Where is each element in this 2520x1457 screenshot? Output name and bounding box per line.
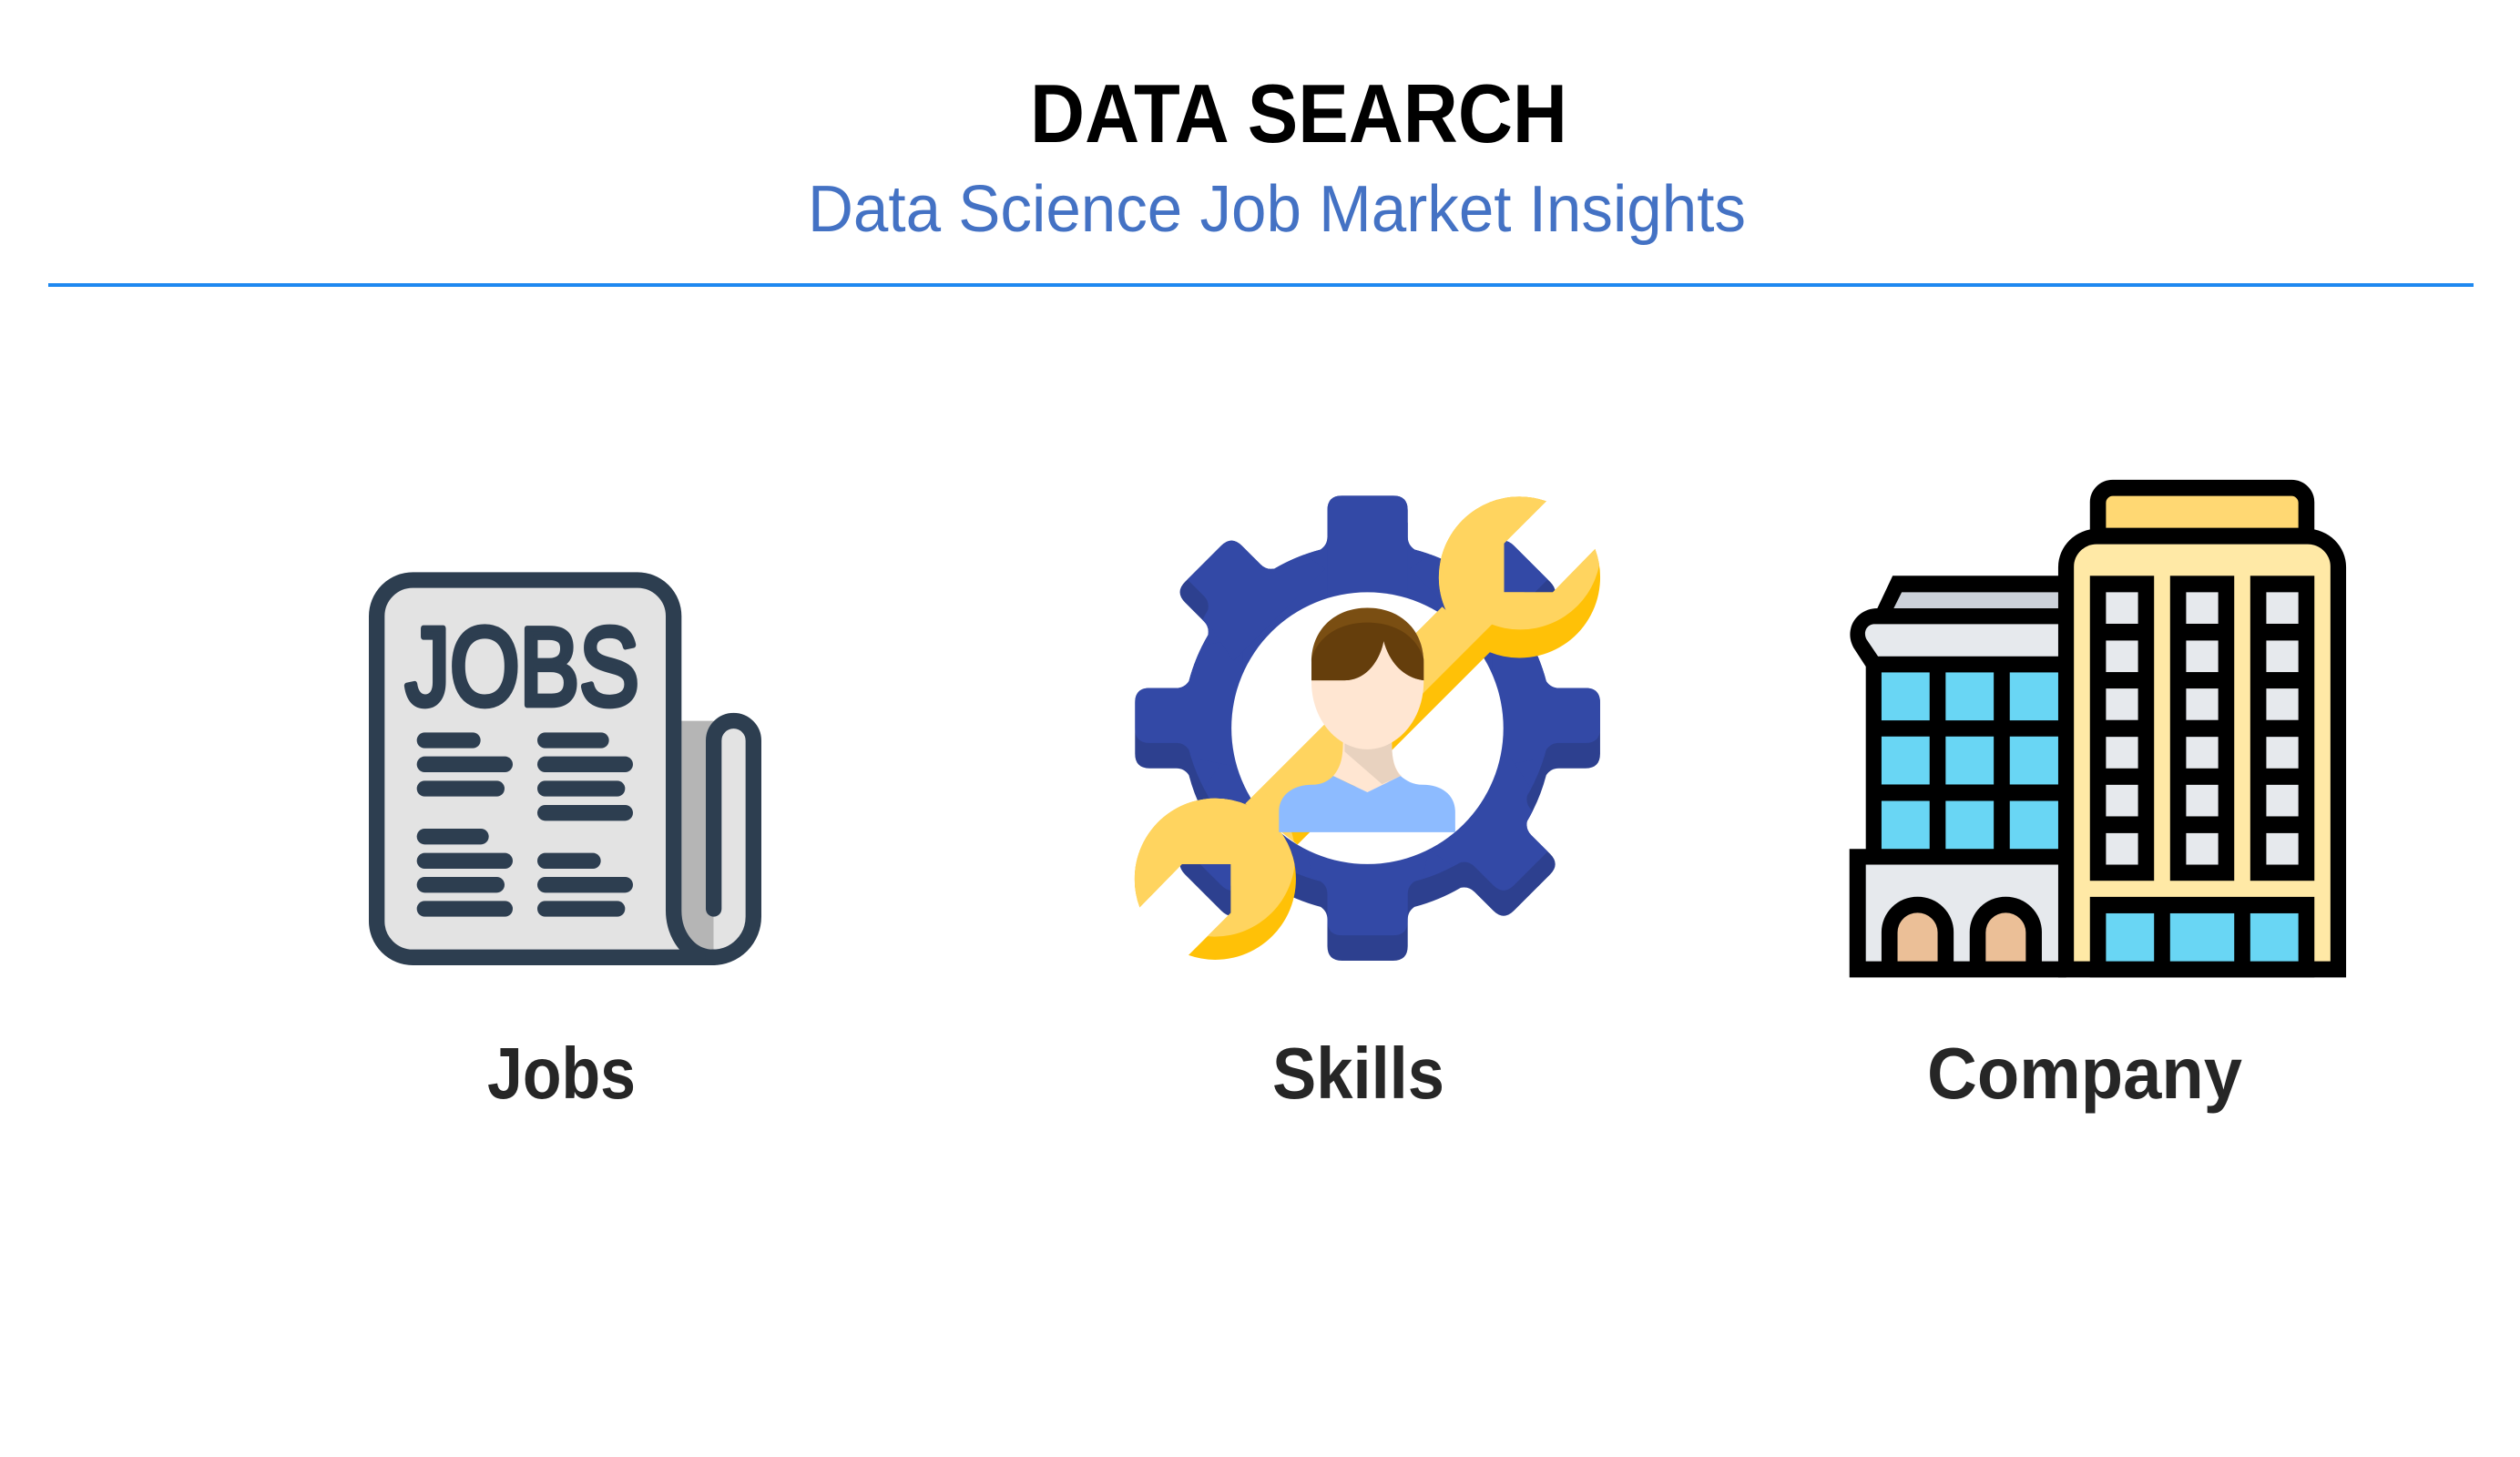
wrench [1135,496,1600,960]
low building roof [1893,592,2058,608]
tower cap silhouette [2090,480,2314,569]
title: DATA SEARCH [1030,68,1567,160]
roll outline [713,720,753,957]
tower cap [2106,496,2299,528]
label: company: Company [1927,1033,2242,1114]
low building cornice [1865,624,2058,657]
gear [1135,495,1600,961]
low building silhouette [1850,576,2066,977]
hair [1311,607,1423,680]
shirt [1279,776,1455,832]
low building windows [1882,672,2058,849]
newspaper roll [714,720,753,957]
newspaper fold shadow [674,721,714,953]
face [1311,607,1423,749]
person [1279,607,1455,832]
newspaper text lines [417,732,633,917]
tower windows [2106,592,2299,865]
label: skills: Skills [1272,1033,1444,1114]
label: jobs: Jobs [487,1033,636,1114]
tower lobby windows [2106,913,2299,962]
tower face [2074,545,2331,962]
neck [1333,740,1402,792]
icon: company buildings [1850,480,2346,977]
newspaper page [377,580,713,957]
window columns [2090,576,2314,977]
subtitle: Data Science Job Market Insights [808,173,1746,246]
arched doors [1882,897,2042,964]
icon: skills gear and wrench [1135,495,1600,961]
newspaper headline: JOBS [405,605,639,728]
ground floor [1866,865,2058,962]
tower silhouette [2058,529,2346,977]
icon: jobs newspaper [377,580,753,957]
